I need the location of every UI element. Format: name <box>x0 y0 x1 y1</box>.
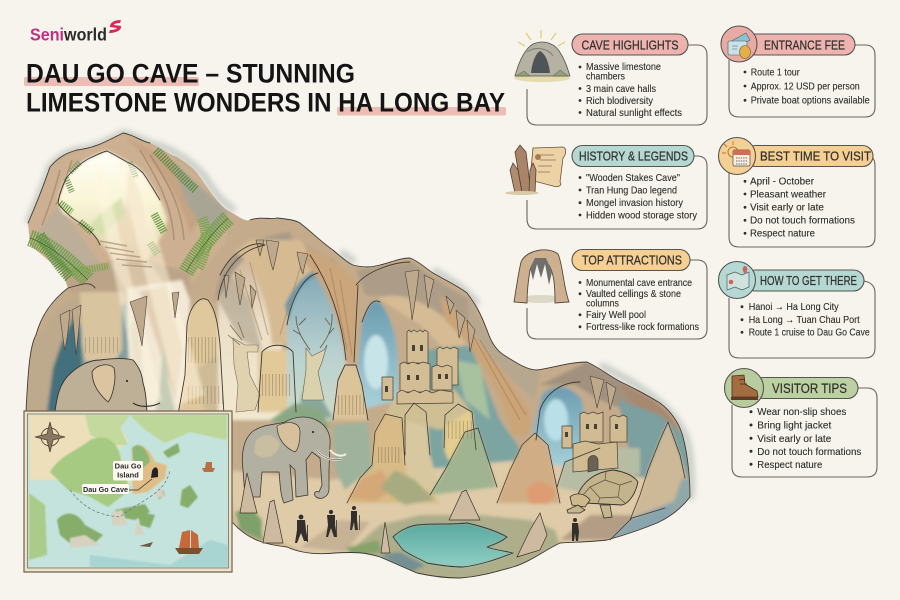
icon: sun and calendar <box>718 138 756 174</box>
location map <box>24 411 232 572</box>
light rays <box>92 165 205 405</box>
bullet list <box>744 66 870 107</box>
icon: stone arch <box>514 250 569 303</box>
panel: best time to visit <box>718 138 875 247</box>
map land and islands <box>29 415 228 567</box>
main column <box>235 240 318 345</box>
heading pill: ENTRANCE FEE <box>764 38 845 52</box>
bullet list: Do not touch formations <box>757 446 861 458</box>
cave marker <box>151 467 158 478</box>
heading pill <box>572 146 694 166</box>
bullet list: Hanoi → Ha Long City <box>749 301 839 313</box>
bullet list: Route 1 tour <box>751 66 800 78</box>
bullet list: Rich blodiversity <box>586 95 654 107</box>
bullet list <box>750 406 861 471</box>
arch 3 blue <box>287 273 346 420</box>
painted rock layers <box>20 130 700 580</box>
left chamber <box>26 292 130 415</box>
cave ink outlines <box>26 133 690 578</box>
bullet list: Fortress-like rock formations <box>586 321 699 333</box>
bullet list: columns <box>586 298 619 310</box>
panel: history and legends <box>505 145 707 229</box>
label: Dau Go Cave: Dau Go Cave <box>83 485 128 494</box>
heading pill: HOW TO GET THERE <box>760 273 857 288</box>
heading pill: BEST TIME TO VISIT <box>760 148 871 164</box>
icon: cave <box>514 30 570 82</box>
pool <box>393 523 513 567</box>
bullet list: 3 main cave halls <box>586 83 656 95</box>
bullet list: chambers <box>586 70 625 82</box>
column 2 with brown streak <box>300 248 358 362</box>
bullet list <box>579 172 698 221</box>
heading pill: VISITOR TIPS <box>772 380 847 396</box>
icon: hiking boot <box>724 368 764 408</box>
large elephant <box>242 417 346 503</box>
panel: cave highlights <box>514 30 707 125</box>
label: Dau Go Island <box>113 461 143 480</box>
label: Dau Go Island: Dau Go <box>115 462 142 470</box>
logo: Seniworld: Seniworld <box>30 24 107 44</box>
arch 5 <box>530 387 590 470</box>
dragon rock formation <box>228 322 260 412</box>
panel: top attractions <box>514 250 707 339</box>
hikers <box>295 506 579 543</box>
right rocks <box>630 422 690 522</box>
ground <box>232 458 647 554</box>
icon: folded map with pins <box>718 262 756 298</box>
bullet list: April - October <box>750 176 814 188</box>
bullet list: Respect nature <box>757 459 822 471</box>
ledge under opening <box>62 262 190 290</box>
bullet list: Bring light jacket <box>757 420 831 432</box>
upper dome opening <box>58 151 167 264</box>
deer rock formation <box>293 314 334 400</box>
right castle <box>562 412 627 472</box>
column 3 base <box>497 433 560 503</box>
stone stairs <box>100 241 152 267</box>
label: Dau Go Cave <box>82 479 152 494</box>
giant turtle <box>567 470 638 518</box>
bullet list: Visit early or late <box>757 433 831 445</box>
bullet list: Pleasant weather <box>750 188 826 200</box>
bullet list: Approx. 12 USD per person <box>751 80 860 92</box>
bullet list: Hidden wood storage story <box>586 209 698 221</box>
heading pill: HISTORY & LEGENDS <box>579 148 688 164</box>
bullet list: Mongel invasion history <box>586 197 684 209</box>
bullet list: Respect nature <box>750 228 815 240</box>
pool bank <box>345 515 560 580</box>
left stalagmite mounds <box>333 422 372 490</box>
bullet list: Vaulted cellings & stone <box>586 288 681 300</box>
right teal wall <box>426 344 521 470</box>
ferns on the dome <box>30 203 228 280</box>
bullet list: Private boat options available <box>751 95 870 107</box>
panel: visitor tips <box>724 368 877 477</box>
title <box>24 58 506 118</box>
heading pill <box>745 146 873 166</box>
yellow centre mounds <box>347 414 440 503</box>
title: LIMESTONE WONDERS IN HA LONG BAY <box>26 88 505 118</box>
moss under elephant <box>235 506 262 540</box>
castle fortress <box>382 330 458 404</box>
upper dome rock <box>30 136 225 278</box>
bullet list: Wear non-slip shoes <box>757 406 846 418</box>
bullet list: Route 1 cruise to Dau Go Cave <box>749 327 870 339</box>
bullet list <box>579 61 682 119</box>
orange streak column 3 <box>440 295 530 435</box>
light shaft chamber <box>127 280 190 415</box>
bullet list <box>579 277 699 333</box>
bullet list: Natural sunlight effects <box>586 107 682 119</box>
heading pill <box>572 250 690 270</box>
bullet list: Fairy Well pool <box>586 309 646 321</box>
heading pill <box>745 270 864 291</box>
bullet list: Massive limestone <box>586 61 661 73</box>
darker green top streaks <box>156 150 196 190</box>
bullet list: Do not touch formations <box>750 215 855 227</box>
bullet list: Visit early or late <box>750 202 824 214</box>
icon: ticket and coins <box>721 26 757 62</box>
bullet list: Tran Hung Dao legend <box>586 184 677 196</box>
castle base rocks <box>557 448 640 492</box>
panel: entrance fee <box>721 26 875 117</box>
far right wall <box>618 400 692 500</box>
column ribbing <box>42 150 526 455</box>
heading pill <box>752 378 858 398</box>
title: DAU GO CAVE – STUNNING <box>26 58 355 88</box>
bullet list <box>741 301 870 339</box>
heading pill: CAVE HIGHLIGHTS <box>582 38 679 52</box>
panel: how to get there <box>718 262 875 358</box>
stalactites <box>60 240 616 410</box>
junk ship <box>139 462 215 554</box>
outer wash halo <box>28 133 691 500</box>
dashed route <box>70 470 170 517</box>
bullet list <box>744 176 855 240</box>
cave illustration <box>20 130 700 580</box>
arch 2 <box>218 255 282 420</box>
small elephant <box>55 358 160 412</box>
arch 4 blue <box>356 301 398 410</box>
bullet list: Ha Long → Tuan Chau Port <box>749 314 860 326</box>
heading pill: TOP ATTRACTIONS <box>582 252 682 268</box>
compass rose <box>35 422 65 452</box>
stalagmite pillar <box>177 298 218 410</box>
bullet list: "Wooden Stakes Cave" <box>586 172 680 184</box>
icon: wooden stakes and scroll <box>505 145 566 195</box>
small stalagmite <box>154 348 176 410</box>
heading pill <box>572 34 688 55</box>
heading pill <box>745 34 855 55</box>
label: Dau Go Island: Island <box>117 470 139 480</box>
bullet list: Monumental cave entrance <box>586 277 692 289</box>
